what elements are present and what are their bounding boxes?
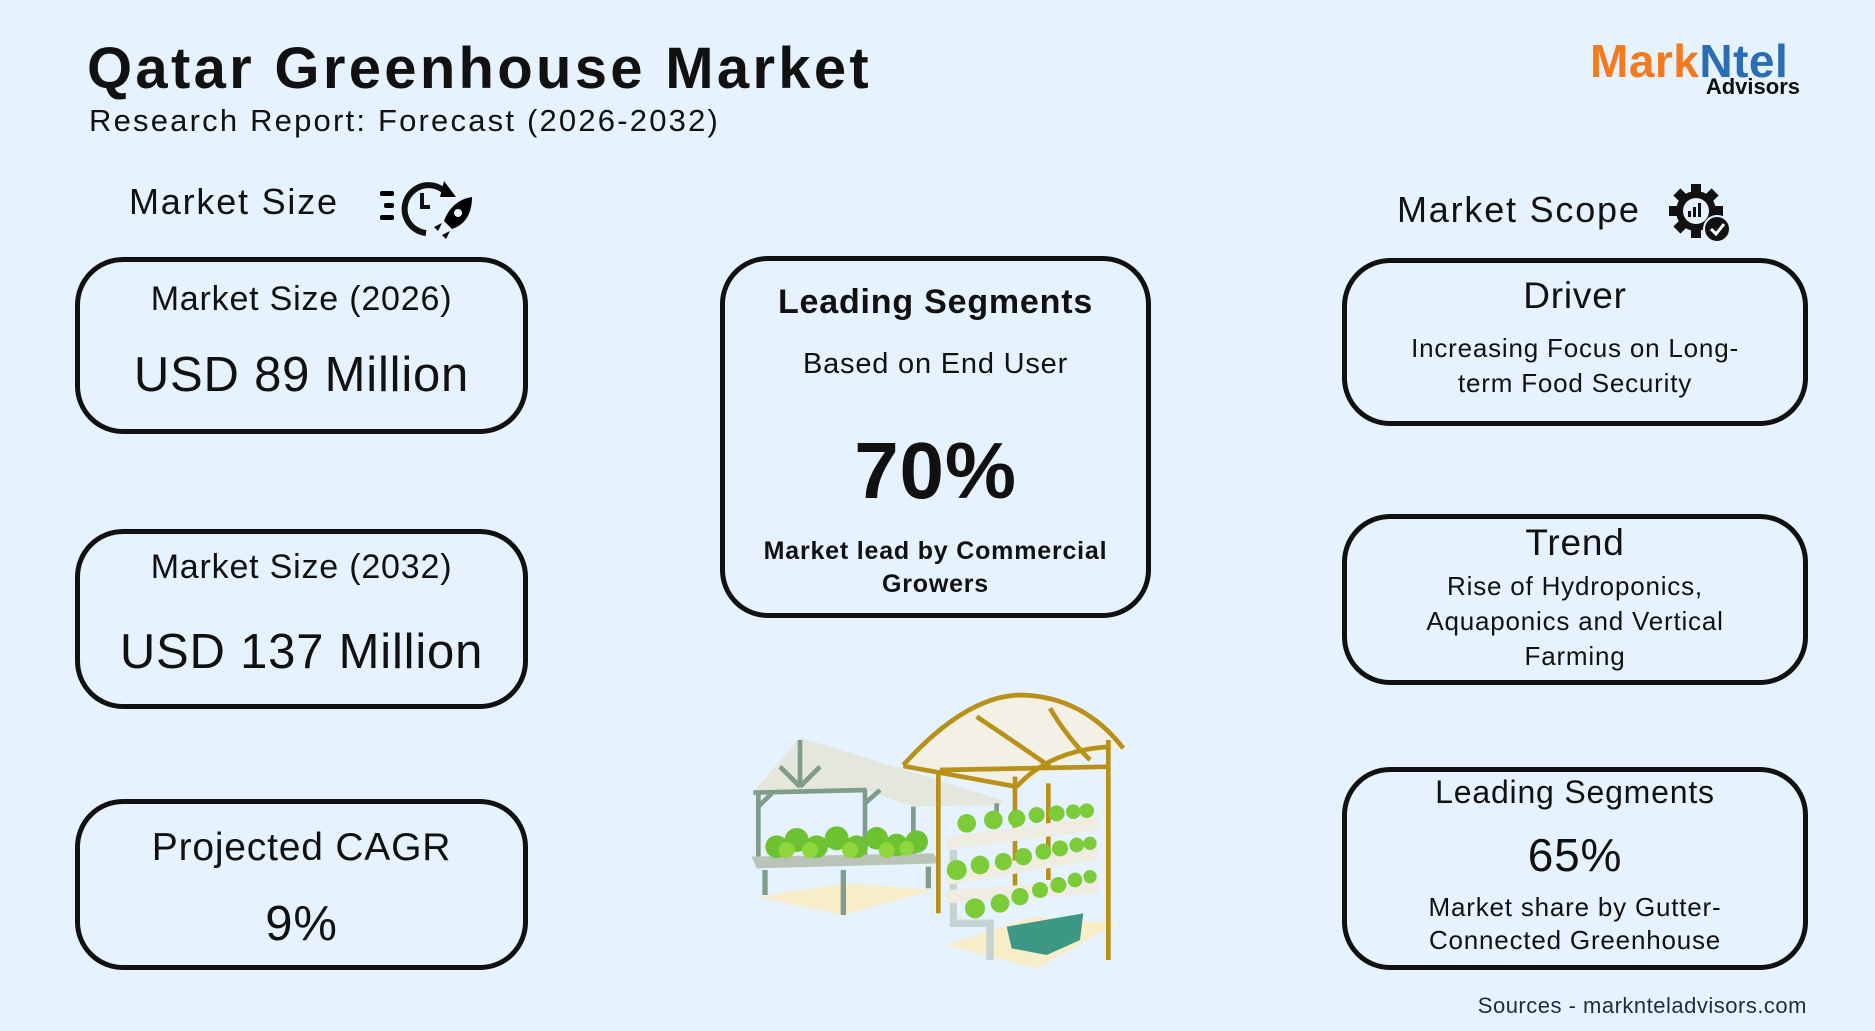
text trend: Farming bbox=[1525, 641, 1625, 671]
value 2026: USD 89 Million bbox=[134, 348, 469, 402]
description: Growers bbox=[882, 570, 989, 598]
text driver: term Food Security bbox=[1458, 368, 1692, 398]
label CAGR: Projected CAGR bbox=[152, 826, 451, 869]
text driver bbox=[1411, 333, 1739, 398]
icon: clock rocket bbox=[380, 181, 472, 239]
value 70%: 70% bbox=[854, 426, 1017, 515]
description: Connected Greenhouse bbox=[1429, 925, 1721, 955]
subheading: Based on End User bbox=[803, 348, 1068, 380]
panel: leading segments right bbox=[1342, 767, 1808, 970]
illustration: greenhouses bbox=[752, 692, 1126, 968]
panel: driver bbox=[1342, 258, 1808, 426]
description bbox=[1429, 892, 1721, 955]
text trend: Aquaponics and Vertical bbox=[1426, 606, 1724, 636]
title: Qatar Greenhouse Market bbox=[87, 36, 872, 101]
heading: market size: Market Size bbox=[129, 181, 339, 222]
heading: Leading Segments bbox=[778, 283, 1093, 321]
logo: MarkNtel bbox=[1590, 35, 1788, 87]
label 2026: Market Size (2026) bbox=[151, 280, 452, 318]
value 65%: 65% bbox=[1528, 829, 1622, 881]
panel: trend bbox=[1342, 514, 1808, 685]
label 2032: Market Size (2032) bbox=[151, 548, 452, 586]
panel: leading segments center bbox=[720, 256, 1151, 618]
heading driver: Driver bbox=[1523, 275, 1627, 316]
value CAGR: 9% bbox=[265, 897, 338, 951]
icon: gear check bbox=[1669, 184, 1729, 241]
description bbox=[764, 537, 1107, 598]
text trend: Rise of Hydroponics, bbox=[1447, 571, 1703, 601]
description: Market lead by Commercial bbox=[764, 537, 1107, 565]
text trend bbox=[1426, 571, 1724, 671]
sources: Sources - marknteladvisors.com bbox=[1478, 993, 1807, 1018]
value 2032: USD 137 Million bbox=[120, 625, 483, 679]
heading trend: Trend bbox=[1525, 522, 1625, 563]
panel: market size 2026 bbox=[75, 257, 528, 434]
logo: Advisors bbox=[1706, 74, 1800, 99]
heading: market scope: Market Scope bbox=[1397, 189, 1641, 230]
subtitle: Research Report: Forecast (2026-2032) bbox=[89, 103, 720, 138]
text driver: Increasing Focus on Long- bbox=[1411, 333, 1739, 363]
description: Market share by Gutter- bbox=[1429, 892, 1721, 922]
panel: market size 2032 bbox=[75, 529, 528, 709]
panel: CAGR bbox=[75, 799, 528, 970]
heading: Leading Segments bbox=[1435, 774, 1715, 810]
